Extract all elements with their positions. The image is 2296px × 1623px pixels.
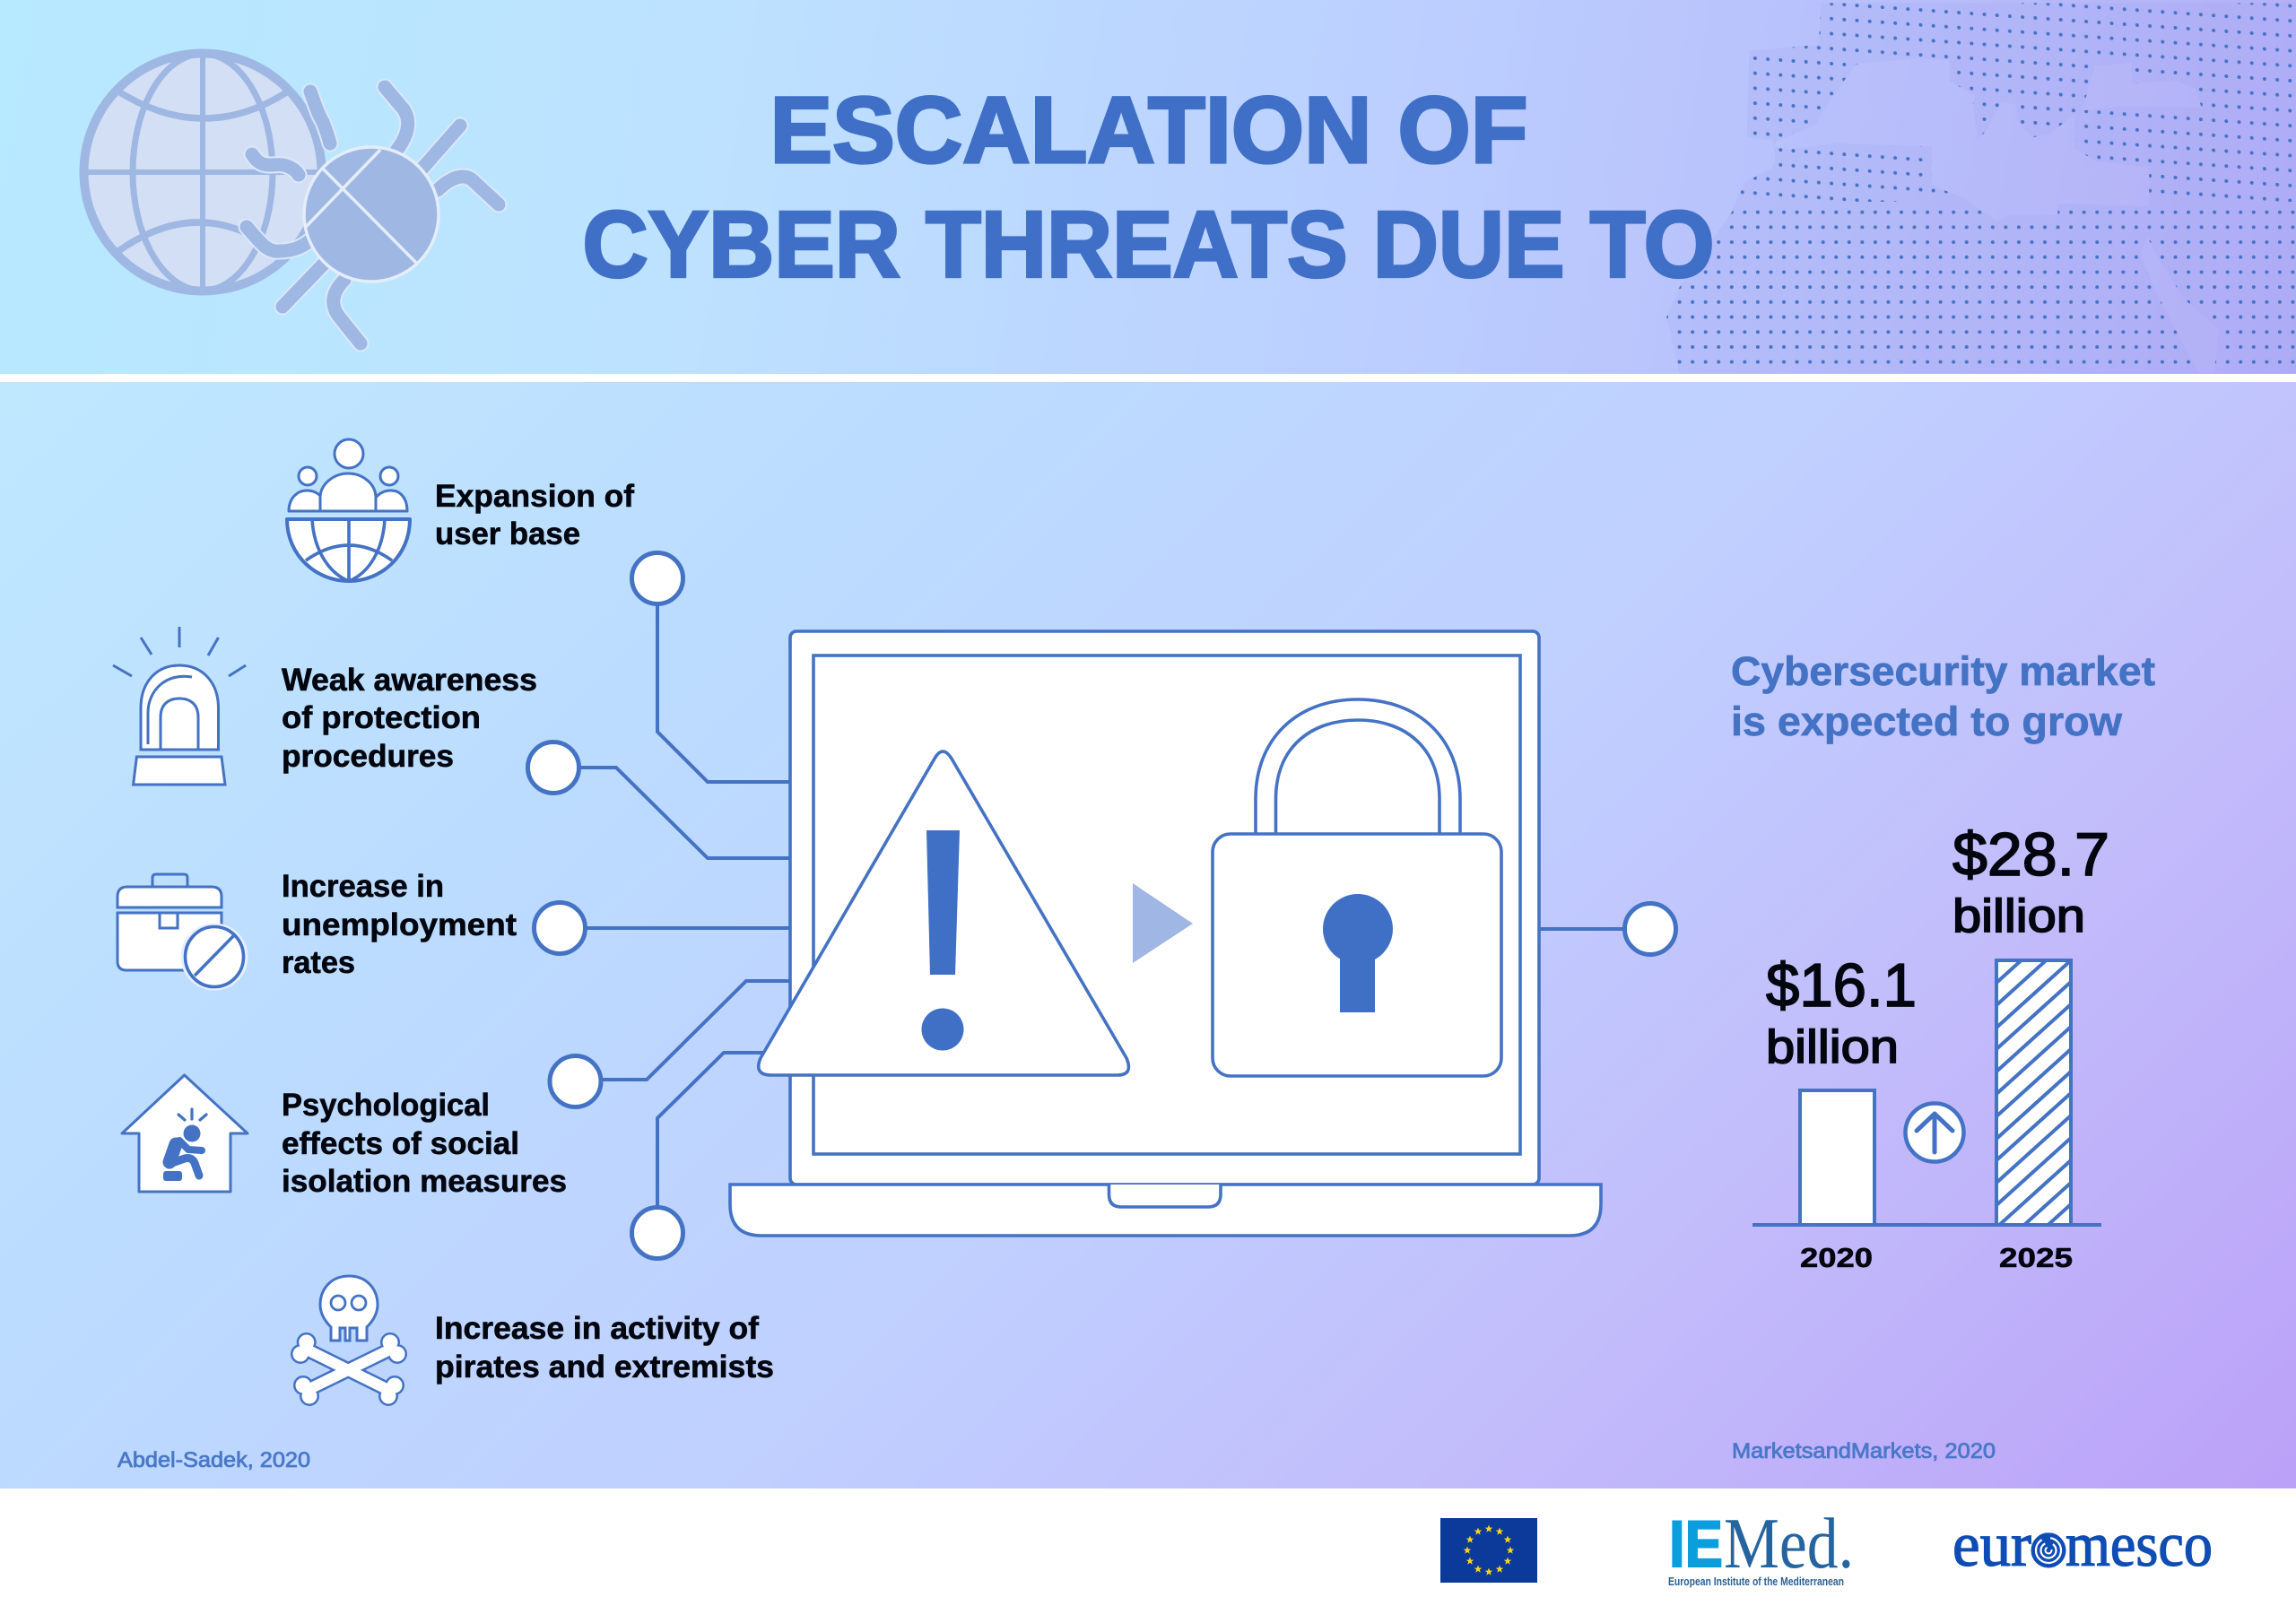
label: expansion of user base: Expansion of bbox=[435, 479, 634, 514]
label: psychological effects bbox=[282, 1088, 567, 1199]
label: psychological effects: effects of social bbox=[282, 1126, 519, 1161]
logo: euromesco: eur bbox=[1952, 1511, 2031, 1580]
connector lines bbox=[553, 578, 1650, 1233]
connector nodes bbox=[527, 552, 1675, 1259]
header band bbox=[0, 0, 2296, 374]
bar 2020 bbox=[1800, 1090, 1874, 1225]
bug legs bbox=[247, 87, 499, 343]
globe bbox=[84, 54, 321, 291]
icon: siren bbox=[113, 627, 246, 785]
logo: euromesco: mesco bbox=[2066, 1511, 2213, 1580]
label: weak awareness: Weak awareness bbox=[282, 663, 537, 698]
label: pirates and extremists: pirates and extremists bbox=[435, 1350, 774, 1384]
laptop base bbox=[730, 1185, 1601, 1236]
label: psychological effects: Psychological bbox=[282, 1088, 490, 1123]
title: ESCALATION OF bbox=[770, 78, 1528, 183]
icon: skull and crossbones bbox=[291, 1276, 407, 1406]
label: weak awareness: procedures bbox=[282, 739, 454, 774]
logo: IEMed bbox=[1668, 1505, 1854, 1588]
logo: IEMed: IE bbox=[1669, 1508, 1723, 1581]
main panel background bbox=[0, 382, 2296, 1488]
icon: briefcase with no sign bbox=[117, 874, 247, 989]
source: right: MarketsandMarkets, 2020 bbox=[1732, 1439, 1996, 1463]
icon: isolated person in house bbox=[122, 1075, 248, 1192]
value label 2020 bbox=[1766, 951, 1917, 1073]
logo: euromesco: o bbox=[2031, 1506, 2066, 1581]
label: pirates and extremists: Increase in activity of bbox=[435, 1311, 759, 1346]
source: left: Abdel-Sadek, 2020 bbox=[117, 1448, 310, 1472]
label: unemployment bbox=[282, 869, 517, 980]
value label 2025: $28.7 bbox=[1952, 820, 2109, 889]
label: weak awareness: of protection bbox=[282, 700, 481, 735]
bar chart: market growth bbox=[1752, 820, 2109, 1294]
label: unemployment: unemployment bbox=[282, 907, 517, 942]
logo: IEMed: European Institute of the Mediterranean bbox=[1668, 1575, 1844, 1588]
value label 2020: $16.1 bbox=[1766, 951, 1917, 1020]
icon: up arrow bbox=[1905, 1103, 1964, 1162]
label: weak awareness bbox=[282, 663, 537, 774]
logo: EU flag bbox=[1440, 1518, 1537, 1583]
heading: cybersecurity market: is expected to grow bbox=[1731, 699, 2123, 744]
title: CYBER THREATS DUE TO bbox=[583, 192, 1715, 298]
bar 2025 bbox=[1995, 959, 2073, 1223]
logo: IEMed: Med. bbox=[1724, 1505, 1854, 1584]
year labels: 2020 bbox=[1800, 1242, 1873, 1273]
padlock bbox=[1213, 699, 1501, 1076]
label: expansion of user base bbox=[435, 479, 634, 551]
bug body bbox=[304, 147, 439, 282]
warning triangle bbox=[759, 751, 1128, 1075]
heading: cybersecurity market: Cybersecurity market bbox=[1731, 648, 2155, 694]
laptop illustration bbox=[730, 631, 1601, 1236]
value label 2025 bbox=[1952, 820, 2109, 942]
logo: euromesco bbox=[1952, 1506, 2213, 1581]
footer band bbox=[0, 1488, 2296, 1623]
laptop screen bbox=[790, 631, 1539, 1185]
label: unemployment: Increase in bbox=[282, 869, 444, 904]
label: expansion of user base: user base bbox=[435, 516, 580, 551]
axis bbox=[1752, 1223, 2101, 1227]
year labels bbox=[1800, 1242, 2073, 1273]
label: unemployment: rates bbox=[282, 945, 355, 980]
icon: globe with bug bbox=[84, 54, 499, 343]
label: psychological effects: isolation measures bbox=[282, 1164, 567, 1199]
arrow: from threat to protection bbox=[1133, 883, 1193, 963]
title bbox=[583, 78, 1715, 298]
world map: dotted Mediterranean region bbox=[1666, 3, 2295, 364]
value label 2020: billion bbox=[1766, 1021, 1899, 1073]
icon: users on globe bbox=[287, 439, 410, 581]
label: pirates and extremists bbox=[435, 1311, 774, 1384]
heading: cybersecurity market bbox=[1731, 648, 2155, 744]
value label 2025: billion bbox=[1952, 890, 2085, 942]
year labels: 2025 bbox=[1999, 1242, 2073, 1273]
